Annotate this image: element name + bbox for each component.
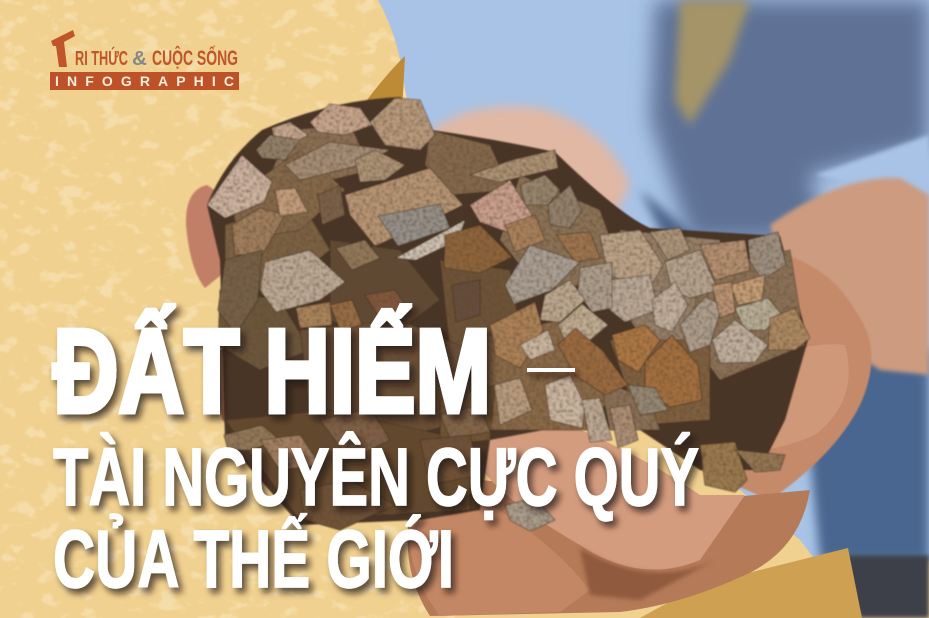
logo: Cuộc Sống: CUỘC SỐNG xyxy=(152,46,238,70)
logo: infographic bar xyxy=(50,72,239,90)
decor: brown textured corner at the bottom xyxy=(640,548,862,618)
logo: ampersand: & xyxy=(132,48,147,70)
title line 1: ĐẤT HIẾM xyxy=(53,305,491,438)
rock pile dark base xyxy=(207,97,808,525)
photo: rear forearm xyxy=(432,106,630,215)
filler rocks xyxy=(218,125,805,520)
photo: dark lower-right corner xyxy=(835,555,929,618)
title dash xyxy=(527,368,575,372)
photo: cupped hands xyxy=(186,185,871,616)
title: main headline xyxy=(53,305,699,605)
photo: right forearm xyxy=(770,178,929,375)
illustration: rock pile xyxy=(207,97,810,531)
decor: brown accent near top of pile xyxy=(358,56,405,112)
logo: Tri Thức & Cuộc Sống Infographic xyxy=(50,30,239,90)
title line 3: CỦA THẾ GIỚI xyxy=(53,514,454,605)
logo: Ri Thức wordmark: RI THỨC xyxy=(75,46,128,70)
logo: infographic label: INFOGRAPHIC xyxy=(55,73,234,89)
rocks xyxy=(207,98,810,531)
photo: blurred blue shirt background xyxy=(378,0,929,618)
logo: T mark xyxy=(51,30,75,67)
